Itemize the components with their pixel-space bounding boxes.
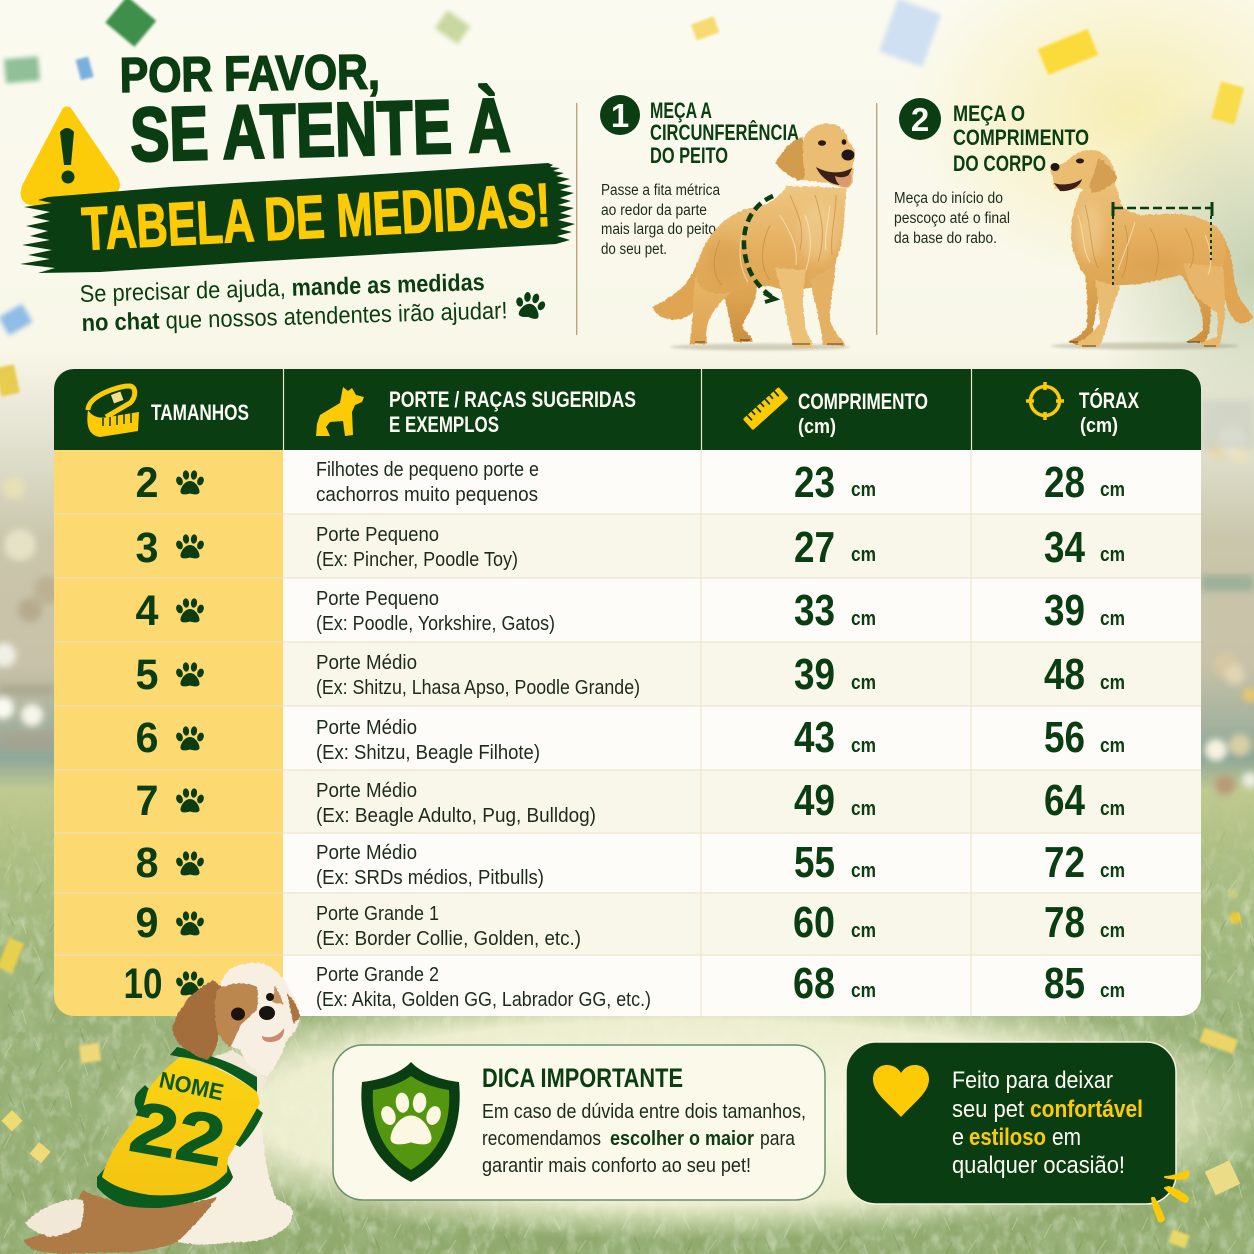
dog: shih tzu with jersey — [23, 963, 300, 1254]
icon: shield with paw — [361, 1062, 460, 1182]
row: size 10 — [124, 959, 1125, 1011]
row: size 10: Porte Grande 2 — [316, 964, 439, 986]
step 1 heading: CIRCUNFERÊNCIA — [650, 120, 799, 145]
row: size 5: cm — [851, 672, 876, 694]
row: size 5: (Ex: Shitzu, Lhasa Apso, Poodle Grande) — [316, 677, 640, 699]
row: size 9: 9 — [136, 899, 158, 947]
row: size 4: 39 — [1044, 586, 1085, 635]
row: size 4: 33 — [794, 586, 835, 635]
row: size 6: 56 — [1044, 713, 1085, 762]
title line: se atente a: SE ATENTE À — [129, 83, 511, 178]
row: size 6: cm — [851, 735, 876, 757]
heading: torax — [1079, 388, 1139, 437]
panel: dica importante — [333, 1045, 825, 1200]
row: size 8: Porte Médio — [316, 842, 417, 864]
row: size 4: Porte Pequeno — [316, 588, 439, 610]
jersey: 22 — [124, 1087, 231, 1182]
row: size 7: 64 — [1044, 776, 1085, 825]
row: size 4: (Ex: Poodle, Yorkshire, Gatos) — [316, 613, 555, 635]
row: size 9: cm — [851, 920, 876, 942]
icon: heart — [873, 1065, 929, 1117]
row: size 2: 28 — [1044, 458, 1085, 507]
help text: Se precisar de ajuda, — [79, 275, 286, 308]
row: size 4: cm — [1100, 608, 1125, 630]
table header — [54, 369, 1201, 450]
row: size 4: 4 — [136, 587, 159, 635]
dica text: recomendamos — [482, 1127, 601, 1150]
divider — [576, 103, 577, 335]
heading: porte — [389, 387, 636, 437]
icon: dog silhouette — [316, 387, 364, 436]
step 2 heading: COMPRIMENTO — [953, 125, 1089, 150]
step 2 text: pescoço até o final — [894, 210, 1010, 227]
jersey: NOME — [157, 1066, 226, 1105]
row: size 7: (Ex: Beagle Adulto, Pug, Bulldog) — [316, 805, 596, 827]
row: size 5: 48 — [1044, 650, 1085, 699]
step 1 heading: DO PEITO — [650, 143, 728, 168]
row: size 9: Porte Grande 1 — [316, 903, 439, 925]
row: size 5: 39 — [794, 650, 835, 699]
heading: dica importante: DICA IMPORTANTE — [482, 1063, 683, 1093]
step number 2 — [899, 98, 941, 140]
heading: comprimento: COMPRIMENTO — [798, 389, 928, 414]
dog: golden retriever side view — [1050, 150, 1253, 350]
row: size 9 — [136, 898, 1125, 950]
row: size 3: 34 — [1044, 523, 1085, 572]
help text — [79, 268, 508, 337]
table body rows — [54, 450, 1201, 1016]
dica text: escolher o maior — [610, 1127, 754, 1150]
step 2: length — [894, 98, 1253, 350]
row: size 8: cm — [1100, 860, 1125, 882]
row: size 10: cm — [851, 980, 876, 1002]
row: size 9: (Ex: Border Collie, Golden, etc.) — [316, 928, 581, 950]
callout text — [952, 1067, 1143, 1179]
dica text: para — [760, 1127, 796, 1150]
row: size 10: 68 — [793, 959, 835, 1008]
callout text: e — [952, 1124, 964, 1151]
heading: torax: TÓRAX — [1079, 388, 1139, 413]
callout text: seu pet — [952, 1096, 1024, 1123]
panel: size table — [54, 369, 1201, 1016]
callout text: Feito para deixar — [952, 1067, 1113, 1094]
row: size 7: 7 — [136, 777, 158, 825]
row: size 8 — [136, 838, 1125, 889]
step 1 heading — [650, 98, 799, 168]
step 1 text: do seu pet. — [601, 241, 667, 258]
row: size 6: 6 — [136, 714, 158, 762]
brush banner — [20, 163, 575, 273]
icon: ruler — [743, 387, 789, 430]
heading: porte: PORTE / RAÇAS SUGERIDAS — [389, 387, 636, 412]
icon: target — [1026, 382, 1064, 420]
row: size 5: 5 — [136, 651, 158, 699]
step 2 text: Meça do início do — [894, 190, 1003, 207]
measure lines: body length — [1113, 202, 1212, 288]
step 1: chest — [600, 95, 855, 350]
row: size 2: cm — [1100, 479, 1125, 501]
row: size 7 — [136, 776, 1125, 827]
panel: comfort callout — [846, 1042, 1188, 1221]
row: size 8: cm — [851, 860, 876, 882]
row: size 2: cm — [851, 479, 876, 501]
row: size 10: 10 — [124, 960, 162, 1008]
step number 1 — [600, 95, 640, 135]
row: size 6 — [136, 713, 1125, 764]
step 2 heading — [953, 101, 1089, 176]
step 2 text: da base do rabo. — [894, 230, 997, 247]
row: size 7: Porte Médio — [316, 780, 417, 802]
row: size 10: 85 — [1044, 959, 1085, 1008]
step number 2: 2 — [911, 101, 929, 138]
row: size 6: Porte Médio — [316, 717, 417, 739]
row: size 2: Filhotes de pequeno porte e — [316, 459, 539, 481]
row: size 10: (Ex: Akita, Golden GG, Labrador GG, etc.) — [316, 989, 651, 1011]
row: size 6: (Ex: Shitzu, Beagle Filhote) — [316, 742, 540, 764]
row: size 10: cm — [1100, 980, 1125, 1002]
row: size 9: 60 — [793, 898, 835, 947]
step 2 heading: DO CORPO — [953, 151, 1046, 176]
icon: sparks — [1152, 1171, 1188, 1221]
icon: warning triangle — [26, 112, 114, 200]
row: size 5 — [136, 650, 1125, 699]
dica text — [482, 1100, 806, 1177]
row: size 2: cachorros muito pequenos — [316, 484, 538, 506]
row: size 3 — [136, 523, 1125, 572]
row: size 7: cm — [851, 798, 876, 820]
row: size 8: 72 — [1044, 838, 1085, 887]
row: size 8: 8 — [136, 839, 158, 887]
row: size 7: 49 — [794, 776, 835, 825]
row: size 2: 23 — [794, 458, 835, 507]
callout text: em — [1052, 1124, 1081, 1151]
step 1 text: ao redor da parte — [601, 202, 707, 219]
help text: mande as medidas — [291, 269, 485, 302]
dica text: Em caso de dúvida entre dois tamanhos, — [482, 1100, 806, 1123]
row: size 7: cm — [1100, 798, 1125, 820]
help text: que nossos atendentes irão ajudar! — [165, 297, 508, 334]
title block — [20, 45, 575, 337]
title line: por favor: POR FAVOR, — [119, 45, 380, 103]
heading: comprimento — [798, 389, 928, 438]
dog head — [172, 963, 300, 1077]
row: size 5: cm — [1100, 672, 1125, 694]
step 2 text — [894, 190, 1010, 247]
step 1 text — [601, 182, 720, 258]
heading: tamanhos: TAMANHOS — [151, 400, 249, 425]
dica text: garantir mais conforto ao seu pet! — [482, 1154, 751, 1177]
row: size 3: cm — [851, 544, 876, 566]
row: size 3: Porte Pequeno — [316, 524, 439, 546]
step 1 text: Passe a fita métrica — [601, 182, 720, 199]
step 1 heading: MEÇA A — [650, 98, 712, 123]
row: size 9: 78 — [1044, 898, 1085, 947]
row: size 3: 27 — [794, 523, 835, 572]
step 1 text: mais larga do peito — [601, 221, 716, 238]
icon: paw — [513, 290, 548, 321]
row: size 4: cm — [851, 608, 876, 630]
step number 1: 1 — [611, 97, 629, 134]
row: size 6: cm — [1100, 735, 1125, 757]
help text: no chat — [81, 308, 160, 337]
heading: comprimento: (cm) — [798, 416, 836, 438]
step 2 heading: MEÇA O — [953, 101, 1025, 126]
row: size 4 — [136, 586, 1125, 635]
callout text: qualquer ocasião! — [952, 1152, 1125, 1179]
row: size 5: Porte Médio — [316, 652, 417, 674]
measure arrow: chest — [744, 196, 775, 302]
row: size 8: (Ex: SRDs médios, Pitbulls) — [316, 867, 544, 889]
heading: porte: E EXEMPLOS — [389, 412, 499, 437]
row: size 2: 2 — [136, 459, 158, 507]
row: size 3: 3 — [136, 524, 158, 572]
callout text: estiloso — [969, 1124, 1046, 1151]
row: size 6: 43 — [794, 713, 835, 762]
callout text: confortável — [1030, 1096, 1143, 1123]
heading: torax: (cm) — [1080, 415, 1118, 437]
row: size 9: cm — [1100, 920, 1125, 942]
row: size 3: cm — [1100, 544, 1125, 566]
dog: golden retriever front view — [652, 124, 855, 351]
row: size 3: (Ex: Pincher, Poodle Toy) — [316, 549, 518, 571]
row: size 2 — [136, 458, 1125, 507]
jersey — [97, 1047, 263, 1208]
icon: measuring tape — [87, 386, 139, 437]
row: size 8: 55 — [794, 838, 835, 887]
banner title: TABELA DE MEDIDAS! — [80, 171, 552, 263]
